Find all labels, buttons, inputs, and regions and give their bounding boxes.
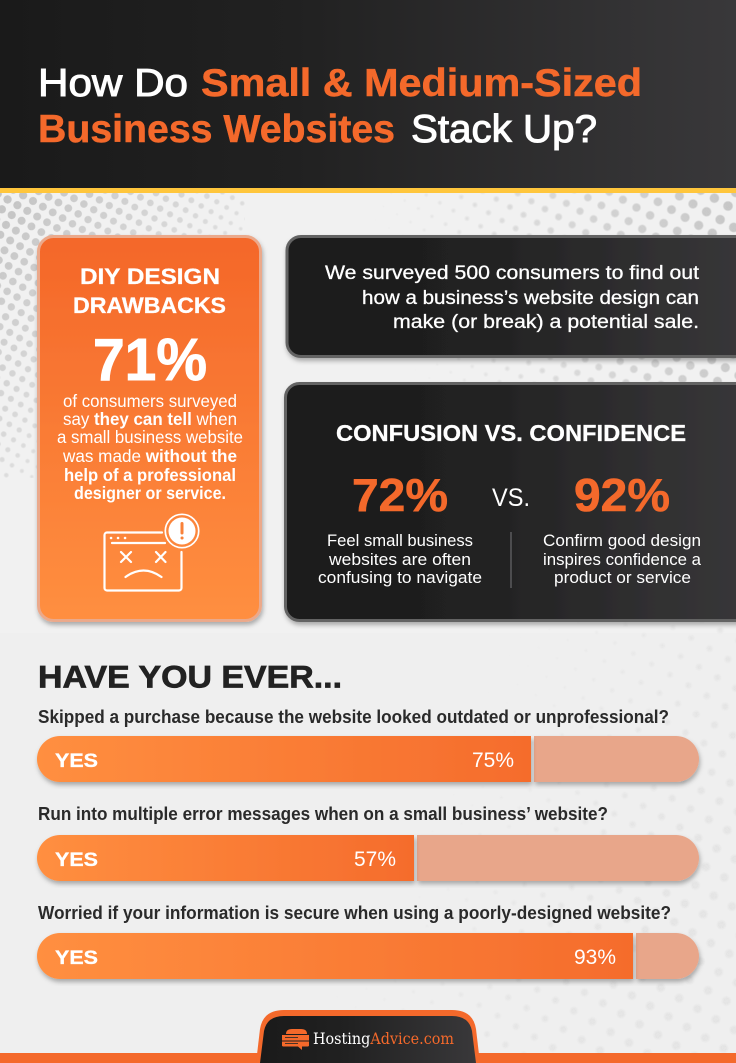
bar chart: 93% yes: YES <box>55 947 98 969</box>
title: Stack Up? <box>411 108 597 151</box>
bar chart: 75% yes: 75% <box>472 749 514 772</box>
text block: DIY description: was made without the <box>62 446 237 466</box>
bar chart: 75% yes <box>37 736 699 782</box>
text block: survey intro: how a business’s website design can <box>362 287 699 309</box>
question 3: Worried if your information is secure when using a poorly-designed website? <box>38 903 671 923</box>
stat: 92%: 92% <box>574 469 670 521</box>
text block: DIY description <box>57 391 243 503</box>
header banner <box>0 0 736 193</box>
text block: confidence: Confirm good design <box>543 531 701 550</box>
panel: survey intro <box>287 236 736 356</box>
text block: survey intro <box>325 262 700 333</box>
question 2: Run into multiple error messages when on a small business’ website? <box>38 804 608 824</box>
text block: DIY description: a small business website <box>57 427 243 447</box>
heading: have you ever: HAVE YOU EVER... <box>38 658 342 694</box>
stat: 72%: 72% <box>352 469 448 521</box>
text block: DIY description: designer or service. <box>74 483 226 503</box>
text block: DIY description: say they can tell when <box>63 409 237 429</box>
panel: DIY design drawbacks <box>38 236 260 620</box>
title <box>38 62 642 151</box>
bar chart: 75% yes: YES <box>55 750 98 772</box>
text block: confusing: Feel small business <box>327 531 473 550</box>
bar chart: 93% yes: 93% <box>574 946 616 969</box>
bar chart: 57% yes: 57% <box>354 848 396 871</box>
icon: broken browser window with alert <box>104 514 199 590</box>
logo wordmark: HostingAdvice.com <box>313 1030 454 1048</box>
heading: DIY design drawbacks: DIY DESIGN <box>80 264 220 289</box>
text block: confidence: product or service <box>554 568 691 587</box>
heading: confusion vs. confidence: CONFUSION VS. CONFIDENCE <box>336 420 686 446</box>
stat: 71%: 71% <box>93 327 207 393</box>
text block: survey intro: make (or break) a potential sale. <box>393 311 699 333</box>
icon: server speech bubble <box>282 1029 309 1050</box>
bar chart: 93% yes <box>37 933 699 979</box>
bar chart: 57% yes: YES <box>55 849 98 871</box>
label: vs.: VS. <box>492 484 530 512</box>
text block: confusing: confusing to navigate <box>318 568 482 587</box>
heading: DIY design drawbacks <box>73 264 226 318</box>
text block: confusing: websites are often <box>328 550 471 569</box>
panel: confusion vs. confidence <box>286 384 736 620</box>
bar chart: 57% yes <box>37 835 699 881</box>
text block: confidence: inspires confidence a <box>543 550 702 569</box>
text block: confusing <box>318 531 482 587</box>
heading: DIY design drawbacks: DRAWBACKS <box>73 293 226 318</box>
text block: DIY description: help of a professional <box>64 465 236 485</box>
title: Business Websites <box>38 108 395 151</box>
text block: survey intro: We surveyed 500 consumers to find out <box>325 262 700 284</box>
title: Small & Medium-Sized <box>201 62 642 105</box>
footer band with logo <box>0 1010 736 1063</box>
text block: confidence <box>543 531 702 587</box>
question 1: Skipped a purchase because the website looked outdated or unprofessional? <box>38 707 669 727</box>
text block: DIY description: of consumers surveyed <box>63 391 237 411</box>
title: How Do <box>38 62 188 105</box>
